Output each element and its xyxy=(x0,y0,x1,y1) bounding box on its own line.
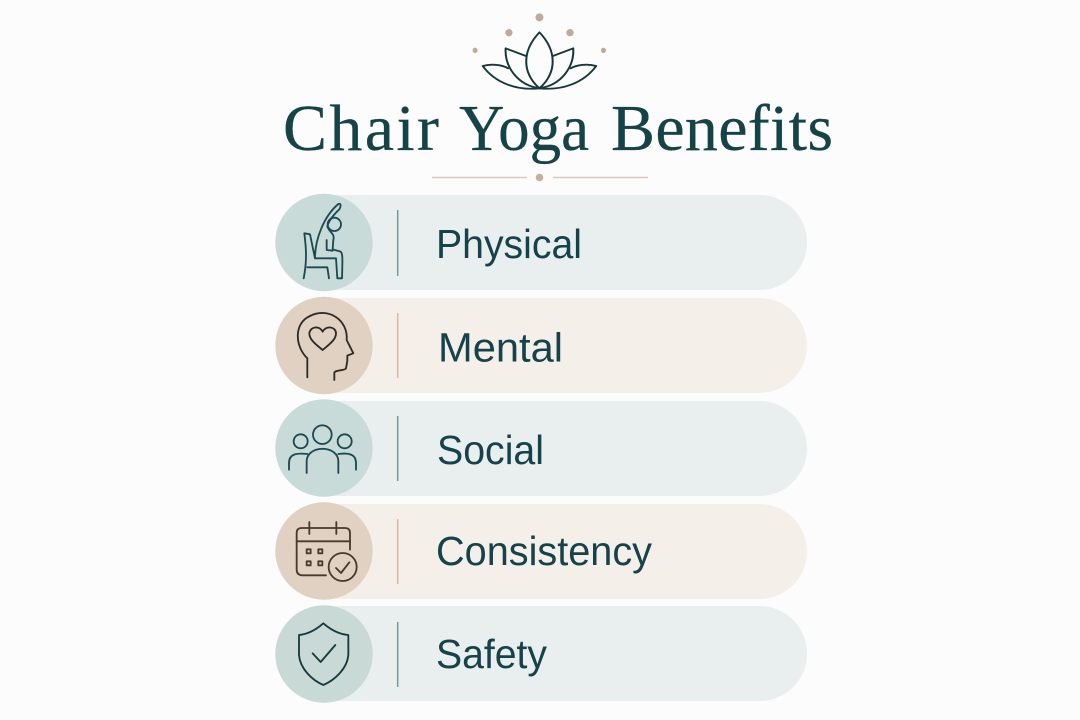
label: Mental: Mental xyxy=(438,324,563,370)
icon: shield with check xyxy=(299,623,348,685)
label: Physical: Physical xyxy=(436,221,582,267)
label: Safety: Safety xyxy=(436,631,547,677)
title: Yoga xyxy=(459,92,589,165)
label: Social: Social xyxy=(437,427,544,473)
divider: Safety xyxy=(397,622,399,687)
icon: group of people xyxy=(289,425,356,473)
icon: person stretching on chair xyxy=(304,204,342,278)
icon circle: Social xyxy=(275,399,373,497)
icon: calendar with check xyxy=(297,522,357,581)
panel: Physical xyxy=(275,194,807,291)
icon circle: Safety xyxy=(275,605,373,703)
title xyxy=(283,92,833,165)
panel: Safety xyxy=(275,605,807,703)
icon circle: Mental xyxy=(275,297,373,394)
panel: Mental xyxy=(275,297,807,394)
divider: Mental xyxy=(397,313,399,378)
icon circle: Consistency xyxy=(275,502,373,600)
icon circle: Physical xyxy=(275,194,373,291)
title divider xyxy=(432,174,648,181)
divider: Consistency xyxy=(397,519,399,584)
icon: head with heart xyxy=(298,313,353,380)
panel: Consistency xyxy=(275,502,807,600)
divider: Social xyxy=(397,416,399,481)
icon: lotus with dots xyxy=(473,13,606,89)
title: Benefits xyxy=(611,92,833,165)
divider: Physical xyxy=(397,210,399,276)
label: Consistency: Consistency xyxy=(436,528,652,574)
panel: Social xyxy=(275,399,807,497)
title: Chair xyxy=(283,92,439,165)
